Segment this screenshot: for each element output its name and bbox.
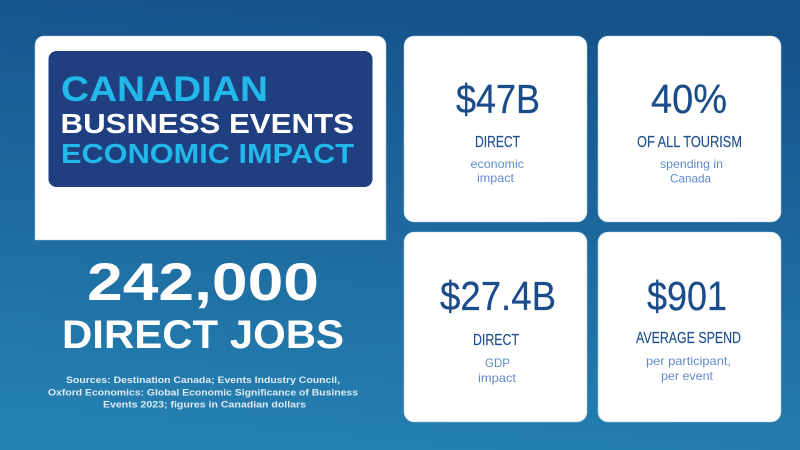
title line: Business Events: BUSINESS EVENTS [60, 108, 354, 139]
description: spending in [660, 157, 723, 171]
description: impact [477, 171, 515, 185]
label: OF ALL TOURISM [637, 134, 742, 151]
title banner [48, 51, 372, 187]
description: GDP [485, 356, 510, 370]
sources note: Events 2023; figures in Canadian dollars [103, 400, 306, 410]
description: Canada [670, 172, 711, 186]
value: $47B [456, 76, 540, 122]
sources note [48, 375, 358, 410]
jobs label: DIRECT JOBS [62, 313, 344, 357]
label: DIRECT [475, 134, 520, 151]
description [646, 354, 731, 383]
description [470, 157, 524, 185]
sources note: Sources: Destination Canada; Events Industry Council, [66, 375, 340, 386]
title line: Economic Impact: ECONOMIC IMPACT [61, 138, 354, 169]
description: economic [470, 157, 524, 171]
card: tourism share [598, 36, 781, 222]
title line: Canadian: CANADIAN [61, 70, 268, 109]
headline stat: jobs [62, 253, 344, 357]
description: per event [661, 369, 714, 383]
value: 40% [651, 76, 727, 122]
card: economic impact [404, 36, 587, 222]
card: average spend [598, 232, 781, 422]
description [660, 157, 723, 186]
label: DIRECT [473, 332, 519, 349]
value: $901 [647, 273, 727, 319]
value: $27.4B [440, 273, 556, 319]
label: AVERAGE SPEND [636, 330, 741, 347]
sources note: Oxford Economics: Global Economic Significance of Business [48, 388, 358, 398]
description [478, 356, 517, 385]
description: impact [478, 371, 517, 385]
jobs number: 242,000 [87, 253, 319, 312]
card: GDP impact [404, 232, 587, 422]
description: per participant, [646, 354, 731, 368]
panel: title [35, 36, 386, 240]
